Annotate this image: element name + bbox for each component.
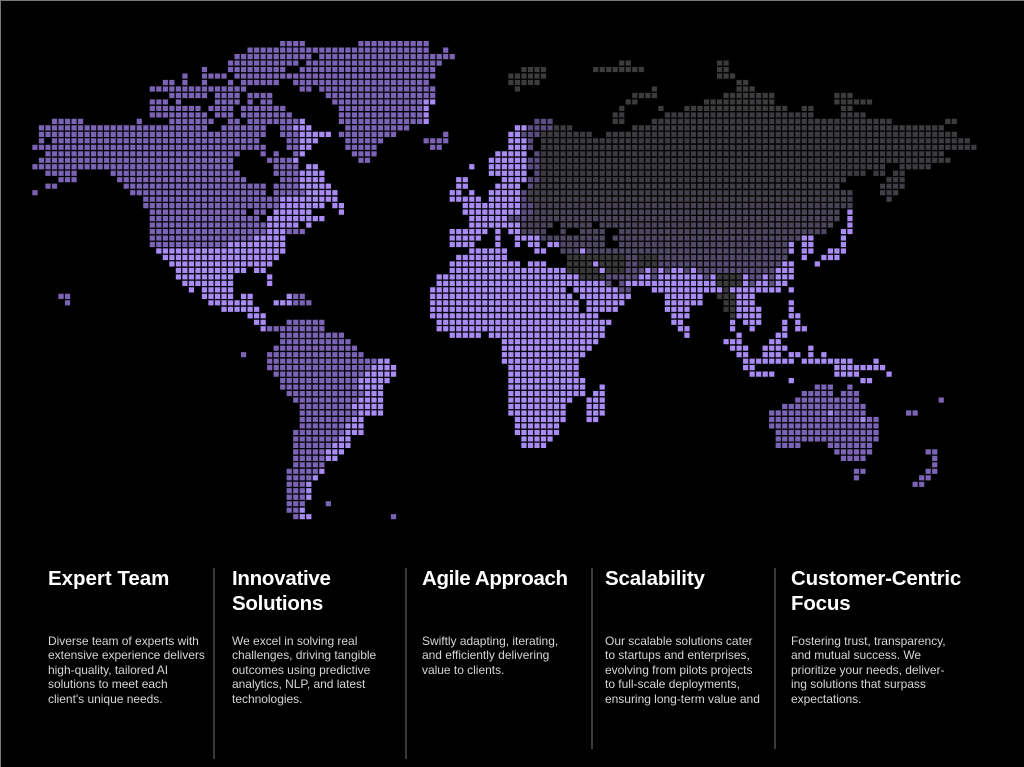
Central Asia dark patch bbox=[566, 257, 742, 316]
text: Innovative Solutions description: analytics, NLP, and latest bbox=[232, 677, 365, 691]
text: Expert Team description: Diverse team of experts with bbox=[48, 634, 199, 648]
text: Customer-Centric Focus description: prioritize your needs, deliver- bbox=[791, 663, 944, 677]
Pacific islands and New Zealand bbox=[905, 400, 944, 484]
panel: Customer-Centric Focus bbox=[791, 567, 961, 706]
heading: Expert Team: Expert Team bbox=[48, 567, 169, 590]
Greenland bbox=[319, 44, 456, 160]
divider 2 bbox=[405, 568, 407, 759]
heading: Innovative Solutions: Innovative bbox=[232, 567, 331, 590]
text: Customer-Centric Focus description: Fostering trust, transparency, bbox=[791, 634, 946, 648]
heading: Customer-Centric Focus: Customer-Centric bbox=[791, 567, 961, 590]
heading: Scalability: Scalability bbox=[605, 567, 705, 590]
text: Agile Approach description bbox=[422, 634, 558, 677]
heading: Innovative Solutions: Solutions bbox=[232, 592, 323, 615]
panel: Innovative Solutions bbox=[232, 567, 376, 706]
divider 3 bbox=[591, 568, 593, 749]
North America southern bright region bbox=[156, 121, 345, 329]
text: Scalability description bbox=[605, 634, 760, 706]
Eastern Europe transition band bbox=[508, 121, 553, 219]
heading: Agile Approach: Agile Approach bbox=[422, 567, 568, 590]
panel: Scalability bbox=[605, 567, 760, 706]
North America northern muted region bbox=[32, 44, 319, 303]
text: Expert Team description: extensive experience delivers bbox=[48, 648, 205, 662]
panel: Expert Team bbox=[48, 567, 205, 706]
South America bright east coast bbox=[299, 361, 397, 517]
text: Customer-Centric Focus description: ing solutions that surpass bbox=[791, 677, 926, 691]
text: Scalability description: to full-scale deployments, bbox=[605, 677, 740, 691]
text: Agile Approach description: Swiftly adapting, iterating, bbox=[422, 634, 558, 648]
South America muted region bbox=[240, 322, 397, 517]
text: Scalability description: evolving from pilots projects bbox=[605, 663, 752, 677]
heading: Customer-Centric Focus: Focus bbox=[791, 592, 850, 615]
text: Scalability description: ensuring long-term value and bbox=[605, 692, 760, 706]
text: Customer-Centric Focus description: expectations. bbox=[791, 692, 861, 706]
text: Innovative Solutions description: challenges, driving tangible bbox=[232, 648, 376, 662]
Iceland bbox=[423, 134, 449, 147]
divider 4 bbox=[774, 568, 776, 749]
text: Expert Team description: high-quality, tailored AI bbox=[48, 663, 168, 677]
text: Scalability description: to startups and enterprises, bbox=[605, 648, 750, 662]
text: Agile Approach description: and efficiently delivering bbox=[422, 648, 549, 662]
Japan and far east islands bbox=[782, 212, 853, 264]
divider 1 bbox=[213, 568, 215, 759]
text: Innovative Solutions description: technologies. bbox=[232, 692, 302, 706]
text: Expert Team description: solutions to meet each bbox=[48, 677, 168, 691]
Australia bbox=[768, 387, 879, 478]
text: Expert Team description: client's unique needs. bbox=[48, 692, 163, 706]
text: Expert Team description bbox=[48, 634, 205, 706]
panel: Agile Approach bbox=[422, 567, 568, 677]
text: Innovative Solutions description: outcomes using predictive bbox=[232, 663, 370, 677]
heading: Customer-Centric Focus bbox=[791, 567, 961, 615]
text: Innovative Solutions description: We excel in solving real bbox=[232, 634, 357, 648]
text: Innovative Solutions description bbox=[232, 634, 376, 706]
text: Customer-Centric Focus description: and mutual success. We bbox=[791, 648, 921, 662]
Europe, Africa and South and Southeast Asia bbox=[423, 102, 892, 445]
heading: Innovative Solutions bbox=[232, 567, 331, 615]
text: Scalability description: Our scalable solutions cater bbox=[605, 634, 753, 648]
text: Customer-Centric Focus description bbox=[791, 634, 946, 706]
Russia and Central Asia bbox=[508, 63, 977, 316]
Australia highlighted cells bbox=[827, 413, 866, 419]
text: Agile Approach description: value to clients. bbox=[422, 663, 504, 677]
